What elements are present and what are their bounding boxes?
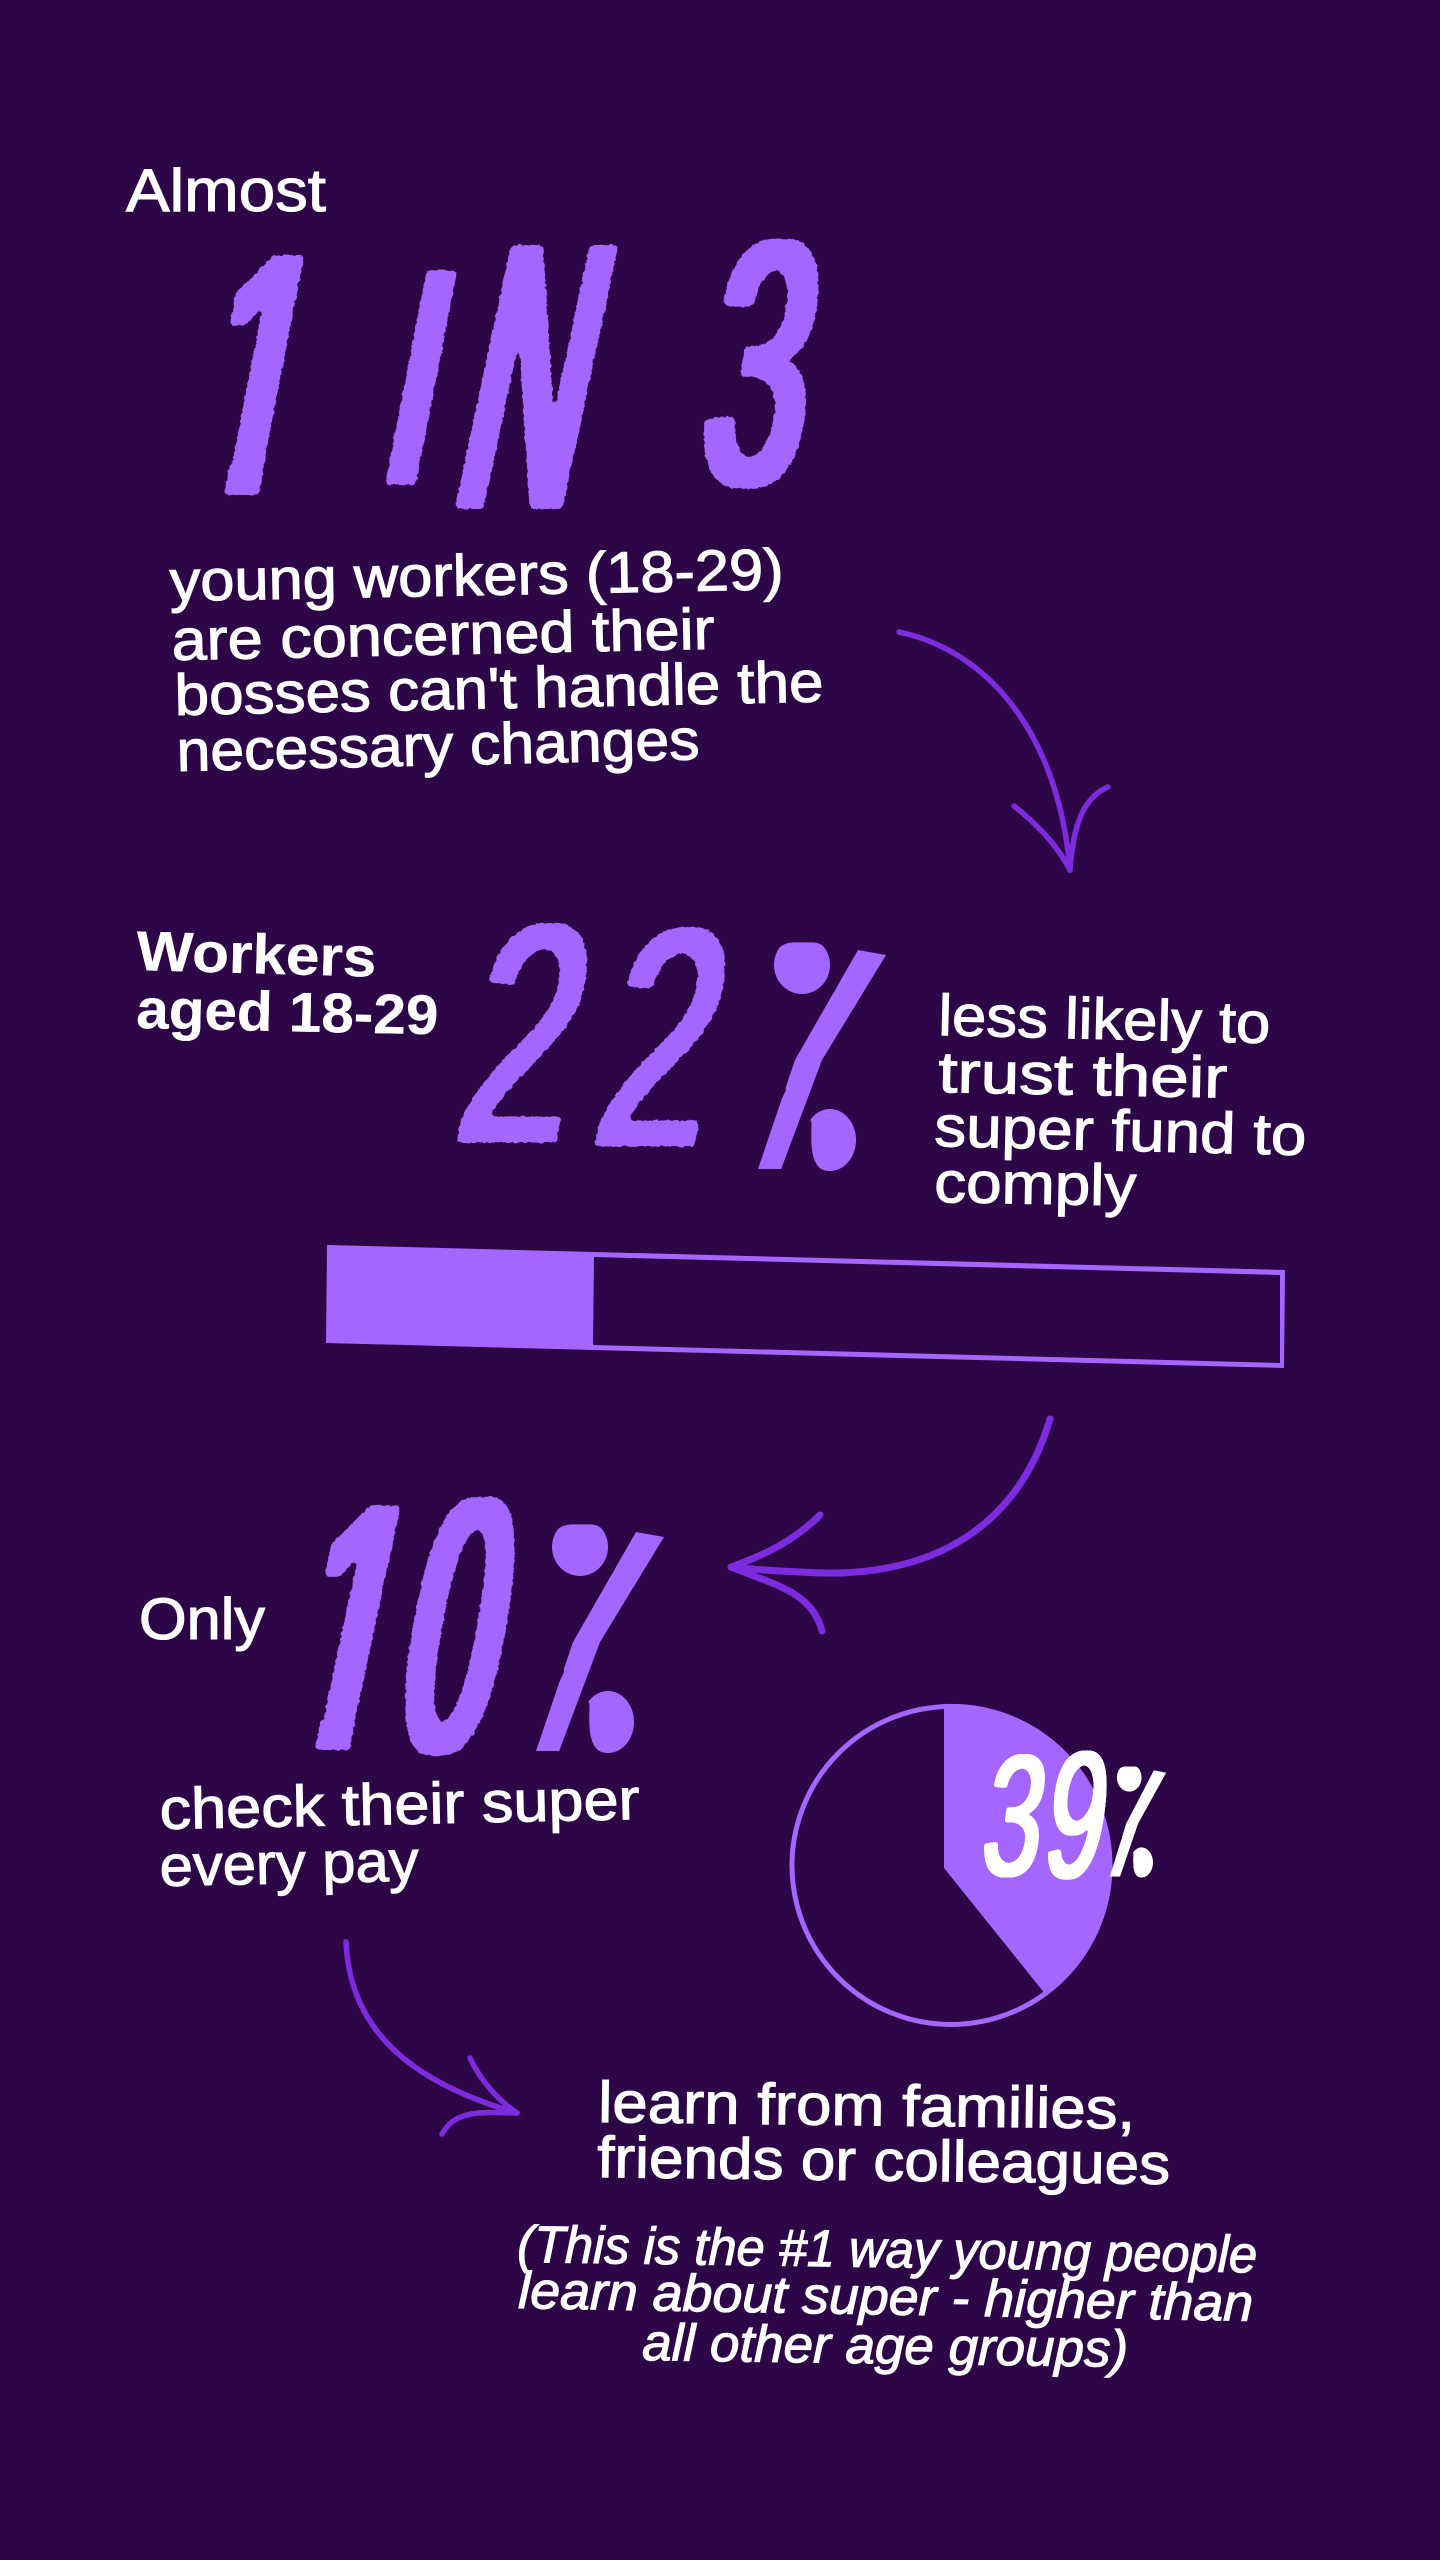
text block: young workers concern: are concerned their [171,597,715,673]
text: Only: Only [139,1587,265,1652]
big number: 10%: 0 [378,1425,541,1827]
text block: young workers concern: young workers (18-29) [169,537,784,614]
arrow: left to 10 percent [731,1419,1050,1631]
text block: less likely to trust: super fund to [934,1094,1307,1168]
text block: learn from families: learn from families, [598,2070,1136,2142]
text block: less likely to trust: comply [934,1150,1137,1219]
text block: young workers concern: necessary changes [176,707,700,784]
headline number: 1 IN 3 [224,238,819,510]
text block: learn from families [597,2070,1171,2197]
headline number: 1 IN 3: I [364,208,478,549]
text: Workers aged 18-29: aged 18-29 [136,977,439,1046]
italic note: number one way young people learn: (This is the #1 way young people [517,2216,1258,2284]
text: Workers aged 18-29: Workers [136,919,377,989]
text: Workers aged 18-29 [136,919,439,1046]
text block: check their super every pay [159,1767,640,1899]
big number: 22%: % [721,878,922,1235]
text block: young workers concern [169,537,824,784]
italic note: number one way young people learn: all other age groups) [642,2314,1129,2379]
big number: 10%: % [499,1460,700,1817]
pie label: 39% [984,1750,1166,1880]
text block: check their super every pay: every pay [159,1829,419,1899]
big number: 22% [457,922,886,1171]
pie chart: 39 percent [792,1704,1182,2024]
pie label: 39%: 9 [1035,1716,1121,1916]
big number: 10% [315,1496,664,1757]
italic note: number one way young people learn [517,2216,1258,2379]
headline number: 1 IN 3: N [432,166,641,588]
progress bar: 22 percent filled [326,1245,1285,1368]
big number: 22%: 2 [576,866,754,1212]
headline number: 1 IN 3: 1 [172,182,352,566]
text block: young workers concern: bosses can't handle the [174,649,824,728]
arrow: down to learn from families [346,1942,517,2134]
pie label: 39%: 3 [973,1720,1058,1912]
headline number: 1 IN 3: 3 [685,170,840,558]
italic note: number one way young people learn: learn about super - higher than [518,2262,1254,2333]
text: Almost: Almost [126,157,326,224]
text block: less likely to trust: trust their [938,1040,1228,1111]
text block: less likely to trust: less likely to [938,983,1271,1056]
text block: less likely to trust [934,983,1307,1219]
arrow: down to 22 percent [899,632,1108,870]
pie label: 39%: % [1094,1735,1182,1909]
text block: learn from families: friends or colleagues [597,2125,1171,2197]
big number: 22%: 2 [438,862,616,1208]
text block: check their super every pay: check their super [159,1767,640,1842]
big number: 10%: 1 [261,1432,450,1823]
